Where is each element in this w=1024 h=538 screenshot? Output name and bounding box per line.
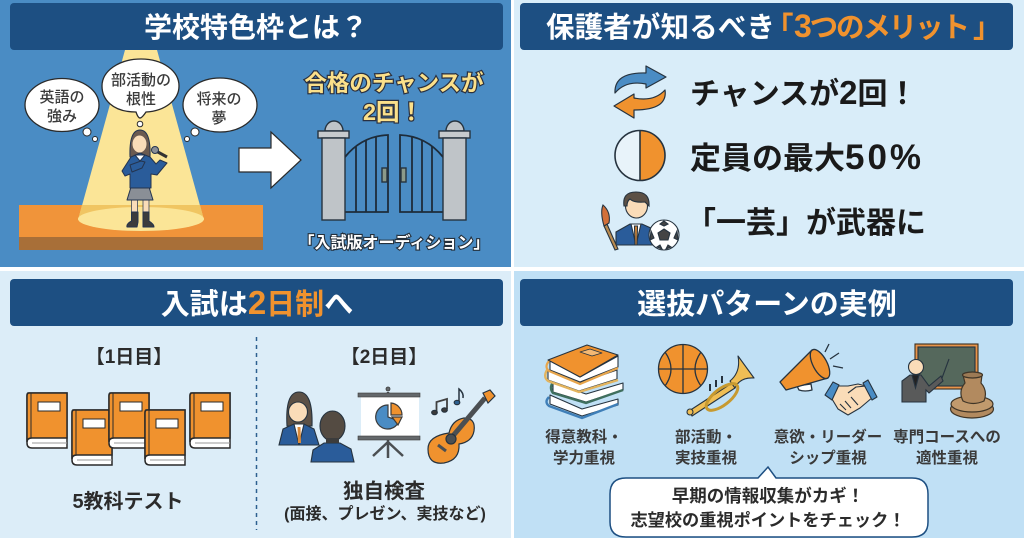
heading: 保護者が知るべき「3つのメリット」 (520, 3, 1013, 50)
icon: guitar and notes (428, 389, 495, 463)
heading: 保護者が知るべき「3つのメリット」: 「 (765, 12, 794, 44)
icon: stack of books (545, 345, 623, 418)
callout: 早期の情報収集: 早期の情報収集がカギ！ (672, 486, 864, 506)
icon: teacher at blackboard (902, 344, 978, 402)
callout: 合格のチャンスが2回 (304, 70, 484, 125)
thought bubble: 部活動の根性: 部活動の (111, 72, 171, 89)
heading: 入試は2日制へ (10, 279, 503, 326)
labels: 得意教科: 得意教科・ (545, 427, 623, 446)
heading: 1日目: 【1日目】 (86, 346, 172, 368)
icon: school gate (318, 121, 470, 220)
labels: 得意教科 (545, 427, 623, 467)
heading: 保護者が知るべき「3つのメリット」: 」 (973, 12, 1002, 44)
text: 定員の最大50%: 定員の最大50% (690, 138, 924, 177)
labels: 部活動 (675, 428, 737, 467)
thought bubble: 英語の強み (25, 78, 99, 142)
heading: 保護者が知るべき「3つのメリット」: 3つのメリット (794, 8, 970, 44)
label: 面接、プレゼン、実技など: (面接、プレゼン、実技など) (284, 504, 486, 523)
thought bubble: 将来の夢: 夢 (211, 110, 227, 127)
labels: 意欲・リーダーシップ: 意欲・リーダー (774, 427, 882, 446)
icon: pottery wheel (950, 372, 994, 418)
thought bubble: 英語の強み: 強み (47, 108, 77, 125)
stage (19, 205, 263, 250)
labels: 部活動: 実技重視 (675, 448, 737, 467)
heading: 選抜パターンの実例 (520, 279, 1013, 326)
callout: 合格のチャンスが2回: 2回！ (363, 99, 423, 125)
labels: 専門コース: 適性重視 (916, 448, 978, 467)
icon: basketball (658, 344, 708, 394)
heading: 2日目: 【2日目】 (341, 346, 427, 368)
heading: 選抜パターンの実例: 選抜パターンの実例 (637, 288, 897, 321)
labels: 部活動: 部活動・ (675, 428, 737, 446)
label: 独自検査: 独自検査 (343, 480, 425, 503)
labels: 専門コース: 専門コースへの (893, 427, 1001, 446)
callout: 早期の情報収集: 志望校の重視ポイントをチェック！ (630, 510, 906, 530)
arrow (239, 132, 301, 188)
thought bubble: 部活動の根性 (102, 59, 179, 127)
labels: 意欲・リーダーシップ: シップ重視 (789, 449, 867, 467)
icon: five textbooks (27, 393, 230, 465)
panel: 学校特色枠とは (0, 0, 511, 267)
icon: trumpet (687, 356, 754, 416)
icon: half circle (615, 130, 665, 180)
heading: 保護者が知るべき「3つのメリット」: 保護者が知るべき (546, 11, 775, 44)
icon: person with brush and ball (602, 192, 679, 250)
labels: 意欲・リーダーシップ (774, 427, 882, 467)
panel: 3つのメリット (514, 0, 1024, 267)
thought bubble: 部活動の根性: 根性 (126, 91, 156, 108)
text: 「一芸」が武器に: 「一芸」が武器に (686, 206, 926, 240)
thought bubble: 将来の夢: 将来の (196, 91, 242, 108)
icon: presentation board (358, 387, 420, 458)
text: チャンスが2回: チャンスが2回！ (690, 74, 917, 111)
icon: student singing (122, 130, 167, 227)
heading: 学校特色枠とは: 学校特色枠とは？ (144, 12, 368, 43)
panel: 選抜パターンの実例 (514, 271, 1024, 538)
thought bubble: 将来の夢 (183, 78, 257, 142)
icon: two cycle arrows (614, 66, 666, 118)
callout: 早期の情報収集 (610, 467, 928, 537)
labels: 専門コース (893, 427, 1001, 467)
thought bubble: 英語の強み: 英語の (39, 89, 85, 106)
icon: megaphone (780, 344, 843, 391)
label: 入試版オーディション: 「入試版オーディション」 (299, 233, 489, 252)
panel: 入試は2日制へ (0, 271, 511, 538)
heading: 学校特色枠とは (10, 3, 503, 50)
heading: 入試は2日制へ: 入試は2日制へ (161, 284, 353, 321)
divider (256, 337, 258, 530)
label: 5教科テスト: 5教科テスト (72, 490, 184, 513)
icon: interview (279, 392, 354, 462)
spotlight (78, 50, 204, 231)
callout: 合格のチャンスが2回: 合格のチャンスが (304, 70, 484, 96)
icon: handshake (825, 380, 877, 415)
labels: 得意教科: 学力重視 (553, 448, 615, 467)
